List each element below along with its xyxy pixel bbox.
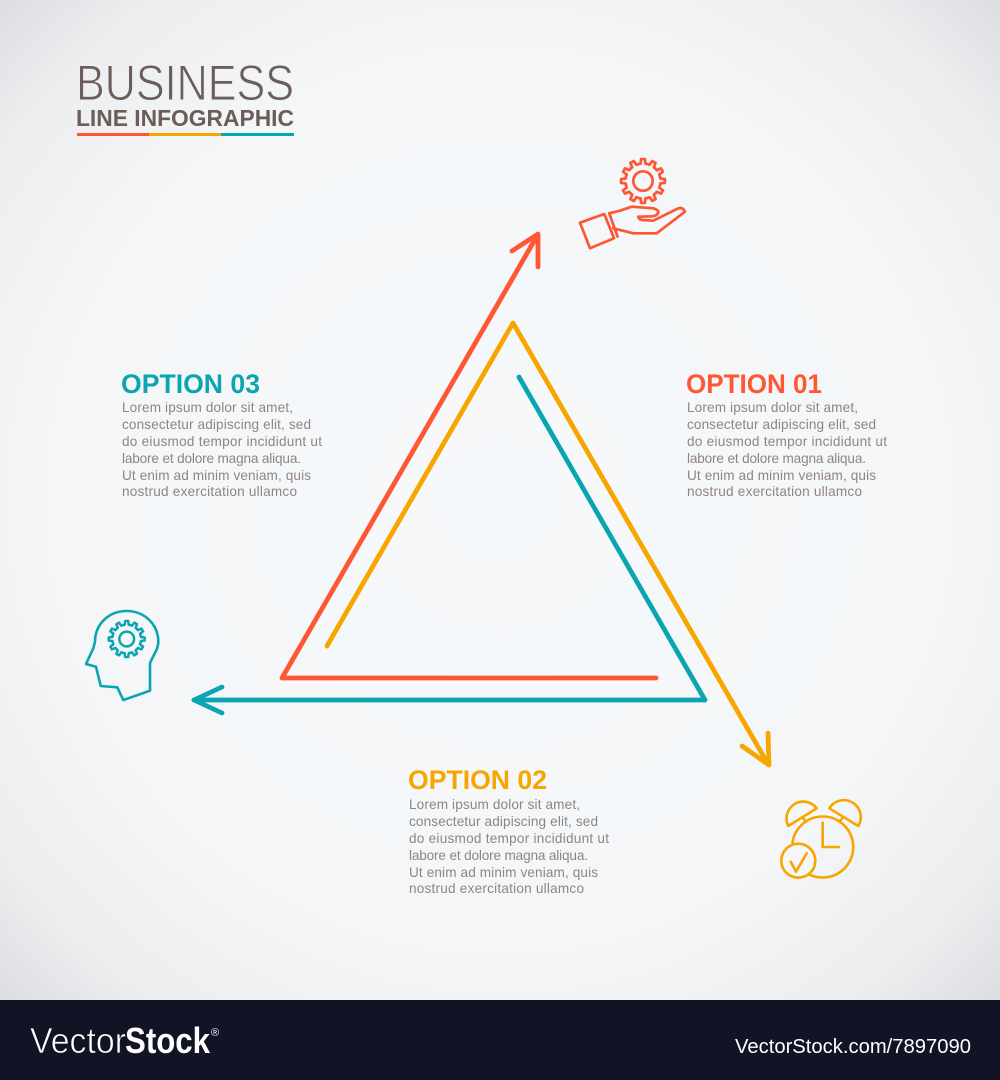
red arrow line	[282, 234, 656, 678]
clock face	[792, 816, 853, 878]
head outline	[86, 611, 158, 700]
body text: Lorem ipsum dolor sit amet,	[687, 400, 858, 415]
body text: nostrud exercitation ullamco	[409, 881, 584, 896]
brain gear	[109, 621, 145, 657]
body text: do eiusmod tempor incididunt ut	[409, 831, 609, 846]
footer logo: Vector	[30, 1020, 126, 1061]
body text: Ut enim ad minim veniam, quis	[687, 468, 876, 483]
option 03 text block	[121, 369, 322, 499]
heading: OPTION 01	[686, 369, 822, 399]
body text: labore et dolore magna aliqua.	[409, 848, 588, 863]
footer logo: ®	[211, 1027, 219, 1039]
hand	[609, 207, 685, 233]
footer logo: Stock	[125, 1020, 211, 1061]
body text: Lorem ipsum dolor sit amet,	[409, 797, 580, 812]
check badge	[781, 844, 815, 878]
body text: nostrud exercitation ullamco	[687, 484, 862, 499]
teal arrow line	[194, 377, 705, 713]
icon: head with gear	[86, 611, 158, 700]
body text: consectetur adipiscing elit, sed	[122, 417, 311, 432]
option 02 text block	[408, 765, 609, 896]
heading: OPTION 03	[121, 369, 260, 399]
title: business: BUSINESS	[76, 55, 294, 111]
heading: OPTION 02	[408, 765, 547, 795]
body text: Ut enim ad minim veniam, quis	[122, 468, 311, 483]
cuff	[580, 213, 618, 248]
triangle diagram	[194, 234, 769, 765]
footer url: VectorStock.com/7897090	[735, 1036, 971, 1058]
body text: nostrud exercitation ullamco	[122, 484, 297, 499]
icon: hand holding gear	[580, 159, 685, 248]
body text: do eiusmod tempor incididunt ut	[122, 434, 322, 449]
body text	[122, 400, 322, 499]
body text	[409, 797, 609, 896]
clock bells	[786, 800, 861, 826]
body text	[687, 400, 887, 499]
footer logo	[30, 1020, 219, 1061]
clock hands	[823, 823, 839, 847]
body text: labore et dolore magna aliqua.	[687, 451, 866, 466]
body text: Lorem ipsum dolor sit amet,	[122, 400, 293, 415]
title block	[76, 55, 294, 136]
title underline	[77, 133, 294, 136]
body text: labore et dolore magna aliqua.	[122, 451, 301, 466]
subtitle: line infographic: LINE INFOGRAPHIC	[76, 105, 294, 131]
body text: Ut enim ad minim veniam, quis	[409, 865, 598, 880]
gear	[621, 159, 665, 203]
body text: consectetur adipiscing elit, sed	[409, 814, 598, 829]
body text: consectetur adipiscing elit, sed	[687, 417, 876, 432]
yellow arrow line	[327, 323, 769, 765]
option 01 text block	[686, 369, 887, 499]
check mark	[791, 853, 807, 872]
body text: do eiusmod tempor incididunt ut	[687, 434, 887, 449]
footer bar	[0, 1000, 1000, 1080]
icon: alarm clock with check	[781, 800, 861, 878]
